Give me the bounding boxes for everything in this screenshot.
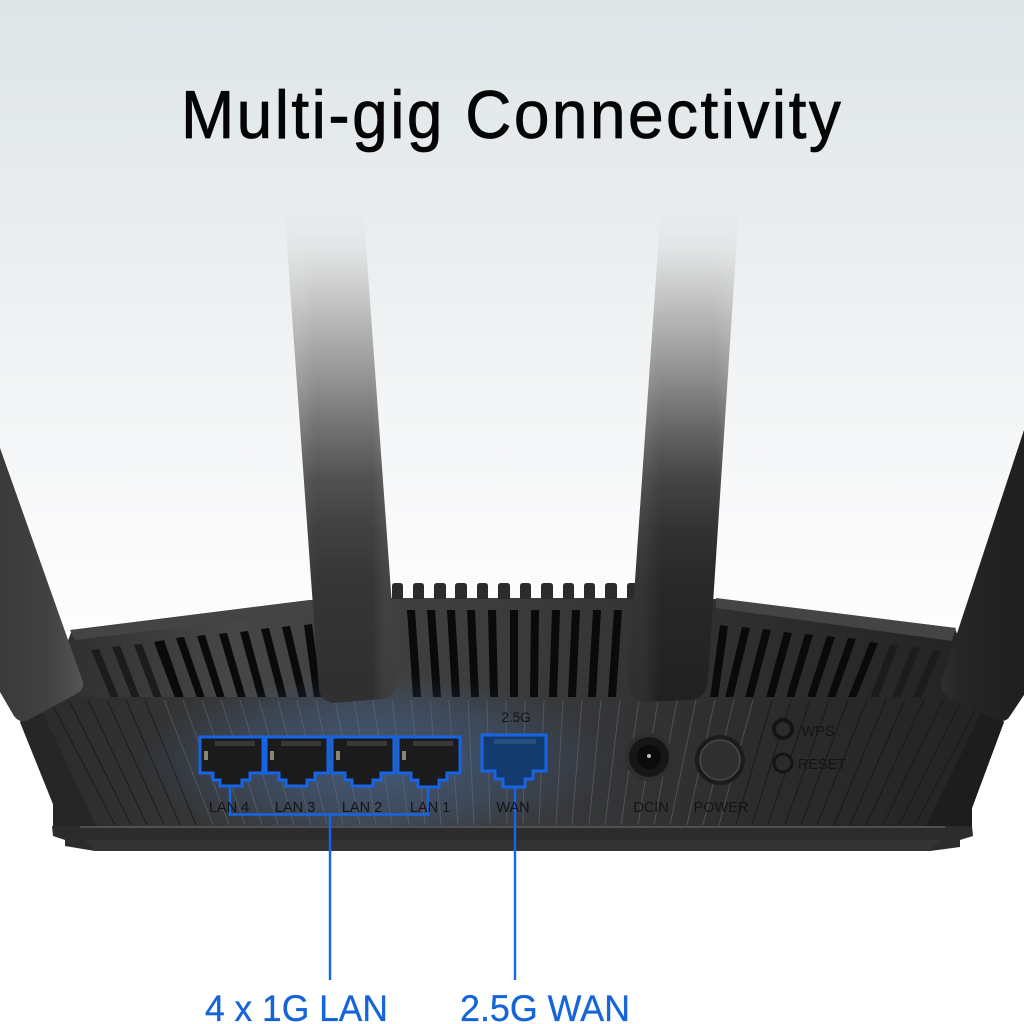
port labels (209, 710, 846, 816)
left side facet (20, 713, 97, 828)
label: POWER: POWER (694, 800, 748, 816)
label: LAN 2: LAN 2 (342, 800, 382, 816)
label: DCIN: DCIN (633, 800, 669, 816)
WAN port (482, 735, 546, 787)
jack pin (647, 754, 651, 758)
antenna: centre left (287, 240, 396, 703)
reset button (774, 754, 792, 772)
vent slots (154, 610, 878, 698)
faint vent slots (91, 644, 941, 698)
lower rear panel (20, 697, 1004, 828)
label: LAN 1: LAN 1 (410, 800, 450, 816)
base plate highlight (80, 826, 945, 828)
outer panel ribs (50, 700, 981, 825)
DC in jack (625, 733, 673, 781)
label: 2.5G: 2.5G (501, 710, 531, 725)
port clips (204, 751, 406, 760)
WPS button (774, 720, 792, 738)
antenna: centre right (634, 240, 736, 702)
label: WAN: WAN (496, 800, 530, 816)
port: LAN 3 (266, 737, 328, 786)
antenna: far left (0, 448, 83, 721)
port: LAN 4 (200, 737, 263, 786)
right side facet (925, 713, 1004, 828)
power button (695, 735, 745, 785)
port contacts (215, 741, 453, 746)
WAN port contacts (494, 739, 536, 744)
antenna: far right (941, 430, 1024, 721)
label: RESET: RESET (798, 757, 846, 773)
port: LAN 2 (332, 737, 394, 786)
label: WPS: WPS (801, 724, 835, 740)
label: LAN 3: LAN 3 (275, 800, 315, 816)
port: LAN 1 (398, 737, 460, 787)
LAN leader (329, 814, 331, 980)
blue glow around ports (140, 675, 610, 845)
top vent housing (40, 598, 985, 715)
WAN leader (514, 788, 516, 980)
base plate lip (85, 840, 940, 851)
callout lines (230, 787, 515, 980)
LAN bracket (230, 787, 428, 814)
inner panel ribs (164, 700, 753, 825)
LAN ports (200, 737, 460, 787)
wing rims (70, 598, 956, 641)
vent teeth (392, 583, 637, 599)
title: Multi-gig Connectivity (181, 76, 841, 152)
label: LAN 4: LAN 4 (209, 800, 249, 816)
base plate (52, 826, 973, 851)
router body (20, 583, 1004, 851)
